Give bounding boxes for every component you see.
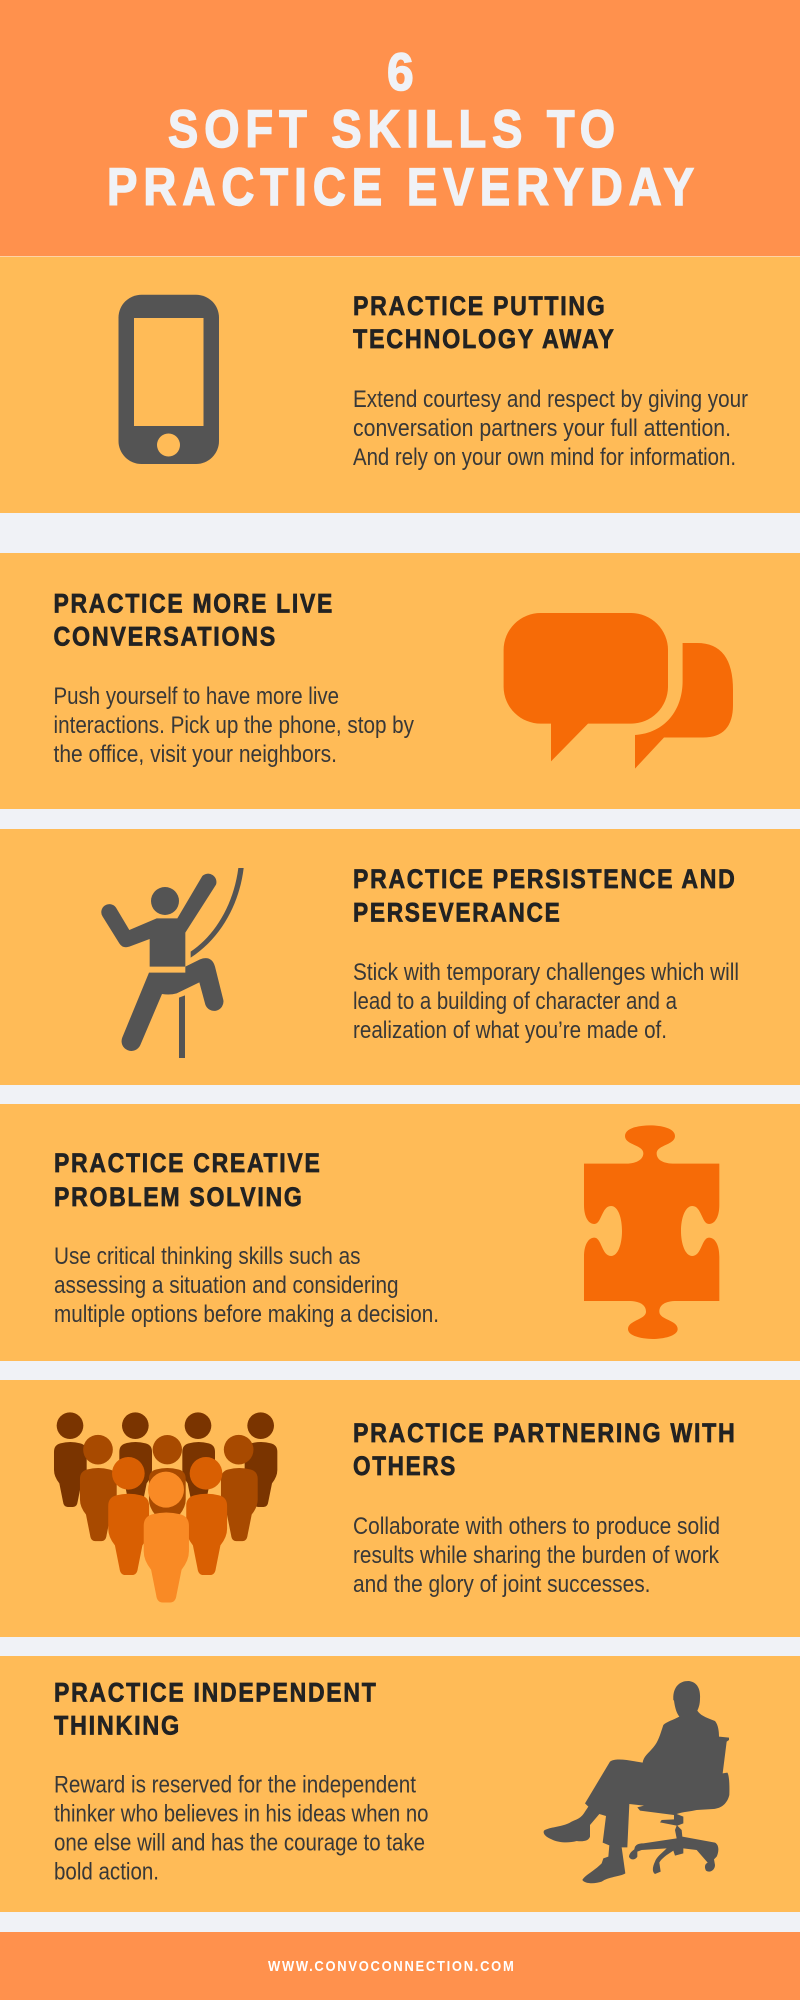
title: SOFT SKILLS TO: [168, 100, 621, 159]
body text: thinker who believes in his ideas when no: [54, 1800, 428, 1828]
body text: realization of what you’re made of.: [353, 1017, 667, 1044]
heading: [54, 1678, 378, 1740]
panel: creative problem solving: [0, 1104, 800, 1361]
panel: live conversations: [0, 553, 800, 809]
panel: partnering with others: [0, 1380, 800, 1637]
heading: PRACTICE CREATIVE: [54, 1148, 322, 1178]
heading: [54, 588, 334, 652]
icon: speech bubbles: [504, 613, 733, 769]
panel: independent thinking: [0, 1656, 800, 1912]
heading: PROBLEM SOLVING: [54, 1182, 304, 1212]
panel: persistence: [0, 829, 800, 1085]
title: 6: [387, 43, 420, 102]
footer url: WWW.CONVOCONNECTION.COM: [268, 1958, 516, 1975]
body text: bold action.: [54, 1858, 159, 1886]
title: PRACTICE EVERYDAY: [107, 158, 700, 217]
body text: Stick with temporary challenges which will: [353, 959, 739, 986]
header banner: [0, 0, 800, 257]
body text: [353, 1513, 720, 1598]
body text: Push yourself to have more live: [54, 683, 339, 710]
footer: [0, 1932, 800, 2000]
icon: smartphone: [118, 295, 219, 464]
heading: [353, 291, 616, 354]
heading: CONVERSATIONS: [54, 622, 277, 652]
body text: and the glory of joint successes.: [353, 1571, 650, 1598]
heading: PRACTICE MORE LIVE: [54, 588, 334, 618]
body text: conversation partners your full attention.: [353, 415, 731, 442]
body text: [54, 683, 414, 768]
body text: [54, 1243, 439, 1328]
heading: PRACTICE PARTNERING WITH: [353, 1418, 736, 1448]
heading: [353, 1418, 736, 1481]
heading: PRACTICE INDEPENDENT: [54, 1678, 378, 1708]
body text: And rely on your own mind for information.: [353, 444, 736, 471]
body text: assessing a situation and considering: [54, 1272, 398, 1299]
body text: [353, 386, 748, 471]
heading: PERSEVERANCE: [353, 898, 562, 928]
body text: Reward is reserved for the independent: [54, 1772, 416, 1798]
heading: THINKING: [54, 1710, 181, 1740]
body text: multiple options before making a decision.: [54, 1301, 439, 1328]
icon: climber: [101, 868, 244, 1058]
icon: group of people: [54, 1412, 277, 1602]
title: [107, 43, 700, 217]
heading: [353, 864, 736, 928]
icon: puzzle piece: [584, 1125, 719, 1339]
body text: [353, 959, 739, 1044]
heading: OTHERS: [353, 1451, 457, 1481]
body text: Extend courtesy and respect by giving your: [353, 386, 748, 413]
body text: one else will and has the courage to take: [54, 1830, 425, 1856]
body text: Use critical thinking skills such as: [54, 1243, 360, 1270]
body text: [54, 1772, 428, 1886]
heading: PRACTICE PUTTING: [353, 291, 606, 321]
body text: the office, visit your neighbors.: [54, 741, 337, 768]
heading: [54, 1148, 322, 1212]
panel: technology away: [0, 257, 800, 513]
body text: lead to a building of character and a: [353, 988, 678, 1015]
body text: interactions. Pick up the phone, stop by: [54, 712, 414, 739]
body text: results while sharing the burden of work: [353, 1542, 720, 1569]
icon: seated businessman silhouette: [544, 1681, 729, 1883]
heading: PRACTICE PERSISTENCE AND: [353, 864, 736, 894]
heading: TECHNOLOGY AWAY: [353, 324, 616, 354]
body text: Collaborate with others to produce solid: [353, 1513, 720, 1540]
